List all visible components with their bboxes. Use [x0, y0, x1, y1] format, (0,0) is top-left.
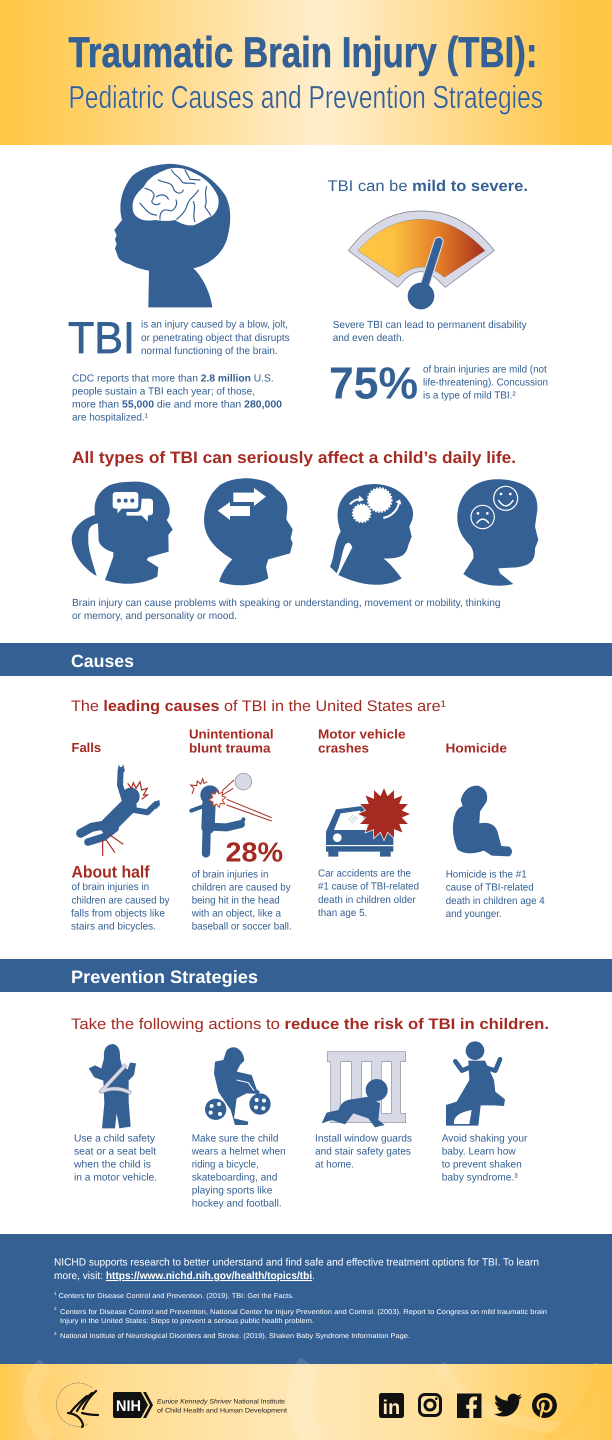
icon: Pinterest [532, 1393, 557, 1418]
icon: standing baby [446, 1041, 505, 1126]
references [54, 1291, 547, 1340]
homicide text [446, 870, 545, 920]
crash text: #1 cause of TBI-related [318, 882, 419, 893]
homicide text: Homicide is the #1 [446, 870, 527, 881]
CDC statistics: CDC reports that more than 2.8 million U.S. [72, 374, 274, 384]
section bar: causes [0, 643, 612, 676]
TBI large label: TBI [68, 314, 135, 363]
research statement: more, visit: https://www.nichd.nih.gov/health/topics/tbi. [54, 1270, 315, 1282]
panel: severity [328, 178, 548, 409]
daily life description: Brain injury can cause problems with speaking or understanding, movement or mobility, thinking [72, 598, 501, 609]
helmet text: skateboarding, and [192, 1173, 278, 1184]
references: Injury in the United States: Steps to prevent a serious public health problem. [60, 1318, 314, 1325]
shaken baby text [442, 1134, 528, 1184]
seat belt text: in a motor vehicle. [74, 1173, 157, 1184]
stat: 75%: 75% [329, 358, 418, 409]
logo: NIH [113, 1392, 153, 1418]
panel: research and references [0, 1234, 612, 1364]
mild TBI text [423, 365, 548, 402]
blunt trauma text: with an object, like a [191, 909, 281, 920]
research statement: NICHD supports research to better understand and find safe and effective treatment options for TBI. To learn [54, 1256, 539, 1268]
TBI definition [141, 320, 290, 357]
icon: child on bike with helmet [205, 1047, 271, 1125]
panel: motor vehicle crashes [318, 726, 419, 919]
mild TBI text: of brain injuries are mild (not [423, 365, 547, 376]
stat: 28%: 28% [226, 837, 283, 868]
safety gates text: at home. [315, 1160, 354, 1171]
crash text: than age 5. [318, 908, 367, 919]
homicide text: and younger. [446, 909, 502, 920]
icon: child head with brain [114, 164, 230, 307]
blunt trauma text: children are caused by [192, 882, 292, 893]
TBI definition: normal functioning of the brain. [141, 346, 278, 357]
panel: falls [71, 740, 170, 932]
NICHD name: of Child Health and Human Development [157, 1408, 287, 1414]
severe TBI text [333, 320, 528, 344]
heading: daily life: All types of TBI can seriously affect a child’s daily life. [72, 449, 516, 467]
crash text: Car accidents are the [318, 869, 411, 880]
panel: logo footer [0, 1364, 612, 1440]
icon: Twitter [494, 1394, 522, 1416]
heading: motor vehicle crashes [318, 726, 406, 756]
shaken baby text: Avoid shaking your [442, 1134, 528, 1145]
header banner [0, 0, 612, 145]
blunt trauma text: of brain injuries in [192, 869, 269, 880]
daily life description: or memory, and personality or mood. [72, 611, 237, 622]
seat belt text: seat or a seat belt [74, 1147, 156, 1158]
crash text [318, 869, 419, 919]
panel: shaken baby [442, 1041, 528, 1184]
seat belt text [73, 1134, 157, 1184]
falls text [71, 882, 170, 932]
heading: blunt trauma [189, 726, 274, 756]
icon: Facebook [457, 1394, 481, 1418]
CDC statistics: more than 55,000 die and more than 280,000 [72, 400, 282, 411]
CDC statistics [72, 374, 282, 424]
heading: mild to severe: TBI can be mild to severe. [328, 178, 528, 195]
panel: safety gates [315, 1052, 412, 1171]
safety gates text [315, 1134, 412, 1171]
section bar: prevention strategies [0, 959, 612, 992]
blunt trauma text [191, 869, 292, 932]
falls text: children are caused by [72, 895, 170, 906]
NICHD name: Eunice Kennedy Shriver National Institute [157, 1398, 285, 1406]
panel: helmet [191, 1047, 286, 1210]
NICHD name [157, 1398, 287, 1414]
heading: blunt trauma: Unintentional [189, 726, 274, 742]
falls text: stairs and bicycles. [71, 922, 156, 932]
icon: falling child [81, 764, 160, 856]
blunt trauma text: baseball or soccer ball. [192, 922, 292, 932]
seat belt text: Use a child safety [74, 1134, 156, 1145]
icon: sitting child [453, 786, 512, 856]
heading: leading causes: The leading causes of TBI in the United States are¹ [71, 698, 446, 715]
logo: NIH: NIH [116, 1398, 141, 1415]
icon: child with seat belt [89, 1044, 136, 1128]
crash text: death in children older [318, 895, 416, 906]
helmet text: riding a bicycle, [192, 1160, 259, 1171]
icon: LinkedIn: in [382, 1397, 400, 1419]
falls text: falls from objects like [71, 909, 165, 920]
shaken baby text: to prevent shaken [442, 1160, 522, 1171]
icon: movement head [204, 478, 293, 585]
helmet text: hockey and football. [192, 1199, 282, 1210]
helmet text [191, 1134, 286, 1210]
heading: motor vehicle crashes: crashes [318, 740, 369, 756]
icons: four child heads [72, 478, 538, 586]
blunt trauma text: being hit in the head [192, 895, 280, 906]
icon: crawling baby and gate [322, 1052, 406, 1127]
icon: LinkedIn [379, 1393, 404, 1419]
heading: motor vehicle crashes: Motor vehicle [318, 726, 406, 742]
seat belt text: when the child is [73, 1160, 151, 1171]
icon: child hit by ball [191, 773, 272, 853]
icon: speech head [72, 482, 173, 584]
references: 1 [54, 1291, 57, 1296]
daily life description [72, 598, 501, 622]
helmet text: playing sports like [192, 1186, 273, 1197]
severe TBI text: and even death. [333, 333, 404, 344]
mild TBI text: is a type of mild TBI.² [423, 391, 516, 402]
severe TBI text: Severe TBI can lead to permanent disability [333, 320, 528, 331]
icon: gauge [348, 211, 494, 309]
panel: seat belt [73, 1044, 157, 1184]
panel: homicide [446, 740, 545, 920]
helmet text: wears a helmet when [191, 1147, 286, 1158]
heading: homicide: Homicide [446, 740, 507, 756]
section bar: prevention strategies: Prevention Strategies [71, 967, 258, 987]
research statement [54, 1256, 539, 1282]
references: Centers for Disease Control and Prevention. (2019). TBI: Get the Facts. [58, 1293, 294, 1300]
logo: HHS [56, 1383, 98, 1427]
panel: what is TBI [68, 164, 290, 424]
CDC statistics: are hospitalized.¹ [72, 413, 149, 424]
references: 3 [54, 1331, 57, 1336]
panel: blunt trauma [189, 726, 292, 932]
heading: falls: Falls [72, 740, 101, 755]
references: 2 [54, 1306, 57, 1311]
heading: reduce the risk: Take the following actions to reduce the risk of TBI in children. [71, 1016, 549, 1033]
shaken baby text: baby. Learn how [442, 1147, 516, 1158]
falls text: of brain injuries in [72, 882, 149, 893]
safety gates text: and stair safety gates [315, 1147, 411, 1158]
TBI definition: or penetrating object that disrupts [141, 333, 290, 344]
CDC statistics: people sustain a TBI each year; of those, [72, 386, 255, 398]
mild TBI text: life-threatening). Concussion [423, 378, 548, 389]
panel: daily life [72, 449, 538, 622]
stat: about half: About half [72, 863, 150, 882]
icon: car crash [326, 787, 411, 857]
heading: blunt trauma: blunt trauma [189, 740, 271, 756]
helmet text: Make sure the child [192, 1134, 279, 1145]
icon: Instagram [420, 1394, 440, 1416]
safety gates text: Install window guards [315, 1134, 412, 1145]
homicide text: cause of TBI-related [446, 883, 534, 894]
shaken baby text: baby syndrome.³ [442, 1173, 518, 1184]
icon: thinking head [330, 484, 413, 585]
icon: mood head [457, 479, 538, 586]
homicide text: death in children age 4 [446, 896, 545, 907]
references: Centers for Disease Control and Prevention, National Center for Injury Prevention and Control. (2003). Report to Congress on mild traumatic brain [60, 1309, 547, 1316]
section bar: causes: Causes [71, 651, 134, 671]
TBI definition: is an injury caused by a blow, jolt, [141, 320, 288, 330]
references: National Institute of Neurological Disorders and Stroke. (2019). Shaken Baby Syndrome Information Page. [60, 1333, 410, 1340]
